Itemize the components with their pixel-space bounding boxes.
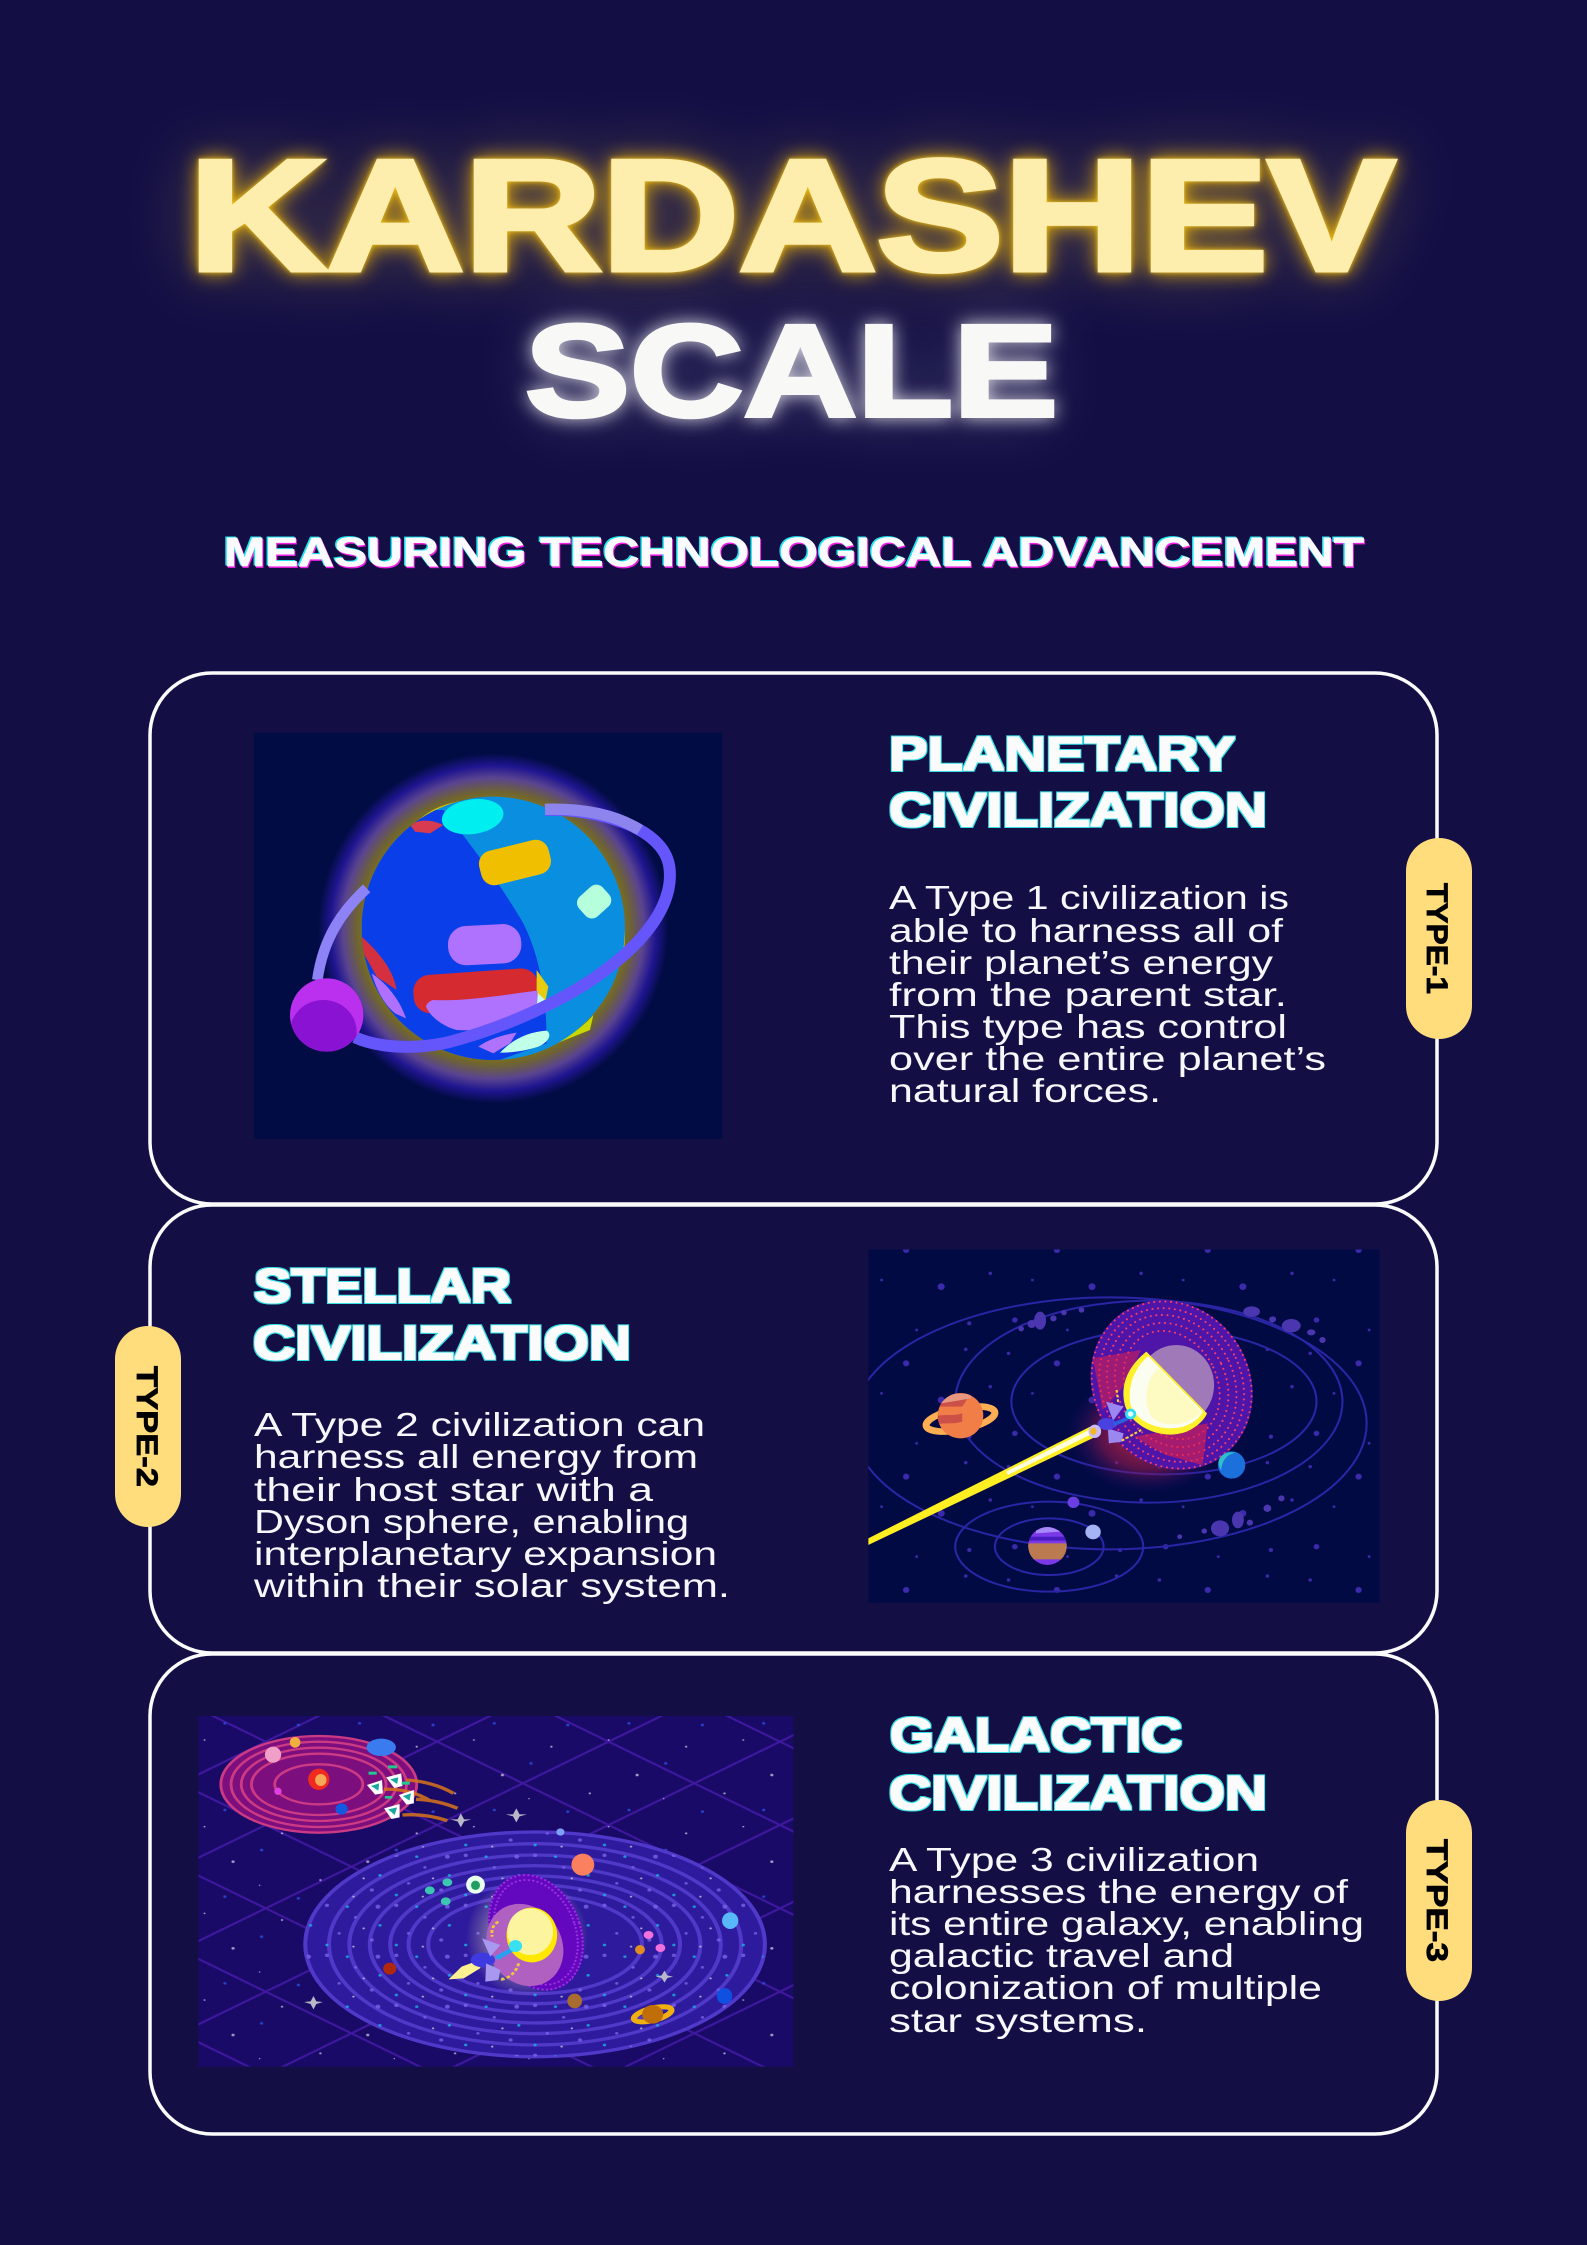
body text: able to harness all of: [889, 912, 1284, 949]
body text: A Type 1 civilization is: [889, 879, 1289, 916]
heading: GALACTIC: [890, 1708, 1182, 1761]
body text: interplanetary expansion: [254, 1535, 717, 1572]
body text: over the entire planet’s: [889, 1040, 1326, 1077]
body text: its entire galaxy, enabling: [889, 1905, 1364, 1942]
body text: galactic travel and: [889, 1937, 1234, 1974]
heading: [253, 1259, 631, 1369]
saturn: [924, 1393, 997, 1438]
title: SCALE: SCALE: [525, 297, 1058, 444]
ship: [1089, 1402, 1136, 1443]
big spiral system: [303, 1828, 767, 2058]
panel: type 3 galactic civilization: [150, 1654, 1437, 2134]
panel: type 2 stellar civilization: [150, 1205, 1437, 1653]
body text: harness all energy from: [254, 1438, 698, 1475]
body text: harnesses the energy of: [889, 1873, 1349, 1910]
body text: Dyson sphere, enabling: [254, 1503, 689, 1540]
body text: star systems.: [889, 2002, 1147, 2039]
red system: [220, 1735, 418, 1833]
heading: [889, 727, 1267, 836]
body text: within their solar system.: [253, 1567, 730, 1604]
body text: natural forces.: [889, 1072, 1161, 1109]
body text: from the parent star.: [889, 976, 1287, 1013]
heading: PLANETARY: [889, 727, 1235, 780]
body text: A Type 2 civilization can: [254, 1406, 705, 1443]
illustration: ringed planet: [254, 733, 722, 1139]
badge: TYPE-2: TYPE-2: [130, 1366, 163, 1487]
striped planet: [1027, 1526, 1067, 1565]
heading: CIVILIZATION: [889, 783, 1267, 836]
body text: This type has control: [889, 1008, 1287, 1045]
heading: STELLAR: [254, 1259, 511, 1312]
badge: TYPE-3: [1406, 1800, 1472, 2001]
illustration: galactic systems: [198, 1716, 793, 2067]
badge: TYPE-3: TYPE-3: [1420, 1839, 1453, 1962]
body text: their planet’s energy: [889, 944, 1274, 981]
fleet: [367, 1765, 458, 1821]
title: KARDASHEV: KARDASHEV: [189, 128, 1395, 304]
badge: TYPE-2: [115, 1326, 181, 1527]
body text: their host star with a: [254, 1471, 654, 1508]
panel: type 1 planetary civilization: [150, 673, 1437, 1204]
body text: [253, 1406, 730, 1604]
badge: TYPE-1: [1406, 838, 1472, 1039]
body text: colonization of multiple: [889, 1969, 1322, 2006]
blue planet: [1218, 1451, 1245, 1479]
body text: [889, 879, 1326, 1109]
heading: CIVILIZATION: [253, 1316, 631, 1369]
illustration: dyson sphere solar system: [852, 1249, 1380, 1603]
heading: [889, 1708, 1267, 1819]
body text: A Type 3 civilization: [889, 1841, 1259, 1878]
heading: CIVILIZATION: [889, 1766, 1267, 1819]
badge: TYPE-1: TYPE-1: [1420, 883, 1453, 994]
body text: [889, 1841, 1364, 2039]
subtitle: MEASURING TECHNOLOGICAL ADVANCEMENT: [224, 529, 1364, 575]
